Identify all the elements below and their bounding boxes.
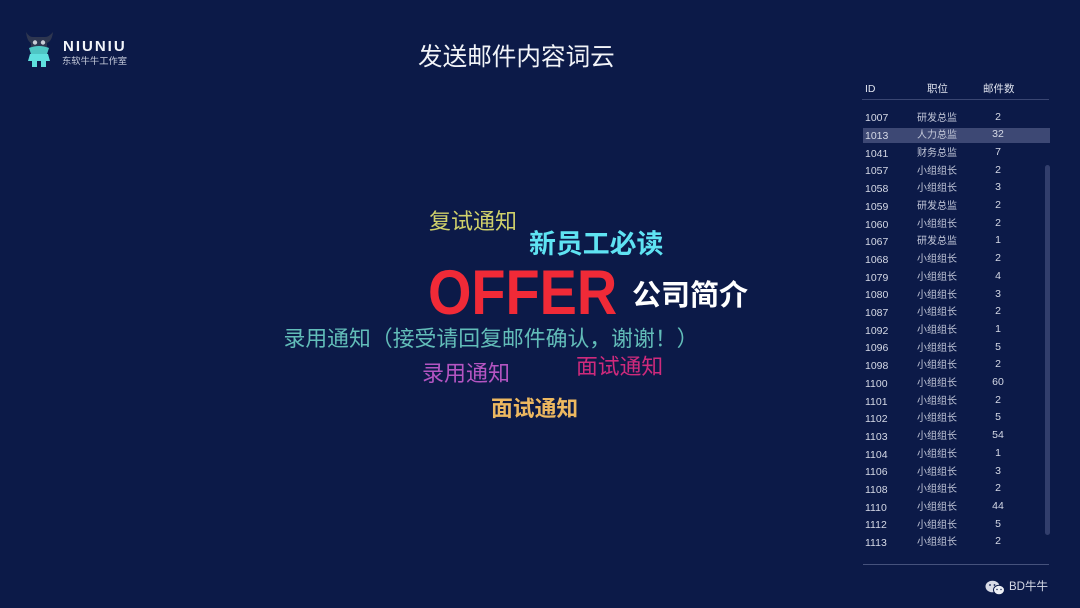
table header: ID (865, 83, 876, 95)
table rows: 小组组长 (917, 183, 957, 194)
table rows: 1 (995, 234, 1001, 246)
table rows: 小组组长 (917, 502, 957, 513)
word: 新员工必读: 新员工必读 (529, 222, 663, 261)
table: employee email counts (862, 83, 1050, 565)
table rows: 小组组长 (917, 325, 957, 336)
table header (862, 80, 1049, 100)
table rows: 5 (995, 518, 1001, 530)
table rows: 1113 (865, 537, 887, 549)
table rows: 2 (995, 394, 1001, 406)
table header: 邮件数 (983, 83, 1014, 95)
table rows: 1100 (865, 378, 888, 390)
table footer line (863, 564, 1049, 565)
table rows: 2 (995, 358, 1001, 370)
table rows: 1103 (865, 431, 888, 443)
table rows: 2 (995, 305, 1001, 317)
table rows: 2 (995, 217, 1001, 229)
table rows: 1059 (865, 201, 888, 213)
table header: 职位 (927, 83, 948, 95)
table rows: 小组组长 (917, 484, 957, 495)
table rows: 1087 (865, 307, 888, 319)
table rows: 小组组长 (917, 431, 957, 442)
table rows: 1 (995, 323, 1001, 335)
table rows: 财务总监 (917, 148, 957, 159)
word: 公司简介: 公司简介 (632, 272, 748, 314)
table rows: 3 (995, 288, 1001, 300)
table rows: 2 (995, 199, 1001, 211)
table rows: 小组组长 (917, 166, 957, 177)
table rows: 4 (995, 270, 1001, 282)
table rows: 小组组长 (917, 413, 957, 424)
logo subtitle: 东软牛牛工作室 (62, 56, 127, 66)
word: 录用通知(接受请回复邮件确认,谢谢!): 录用通知（接受请回复邮件确认，谢谢！） (284, 322, 699, 353)
watermark text: BD牛牛 (1009, 581, 1048, 593)
selected row highlight (863, 128, 1050, 143)
table rows: 2 (995, 111, 1001, 123)
table rows: 1079 (865, 272, 888, 284)
table rows: 研发总监 (917, 112, 957, 124)
scrollbar (1045, 165, 1050, 535)
table rows: 小组组长 (917, 466, 957, 478)
table rows: 1068 (865, 254, 888, 266)
table rows: 1060 (865, 219, 888, 231)
word: OFFER: OFFER (428, 258, 617, 328)
table rows: 5 (995, 411, 1001, 423)
table rows: 小组组长 (917, 254, 957, 265)
table rows: 1067 (865, 236, 888, 248)
table rows: 1007 (865, 112, 888, 124)
table rows: 小组组长 (917, 378, 957, 389)
title: 发送邮件内容词云 (418, 37, 615, 73)
table rows: 32 (992, 128, 1004, 140)
table rows: 小组组长 (917, 537, 957, 548)
table rows: 1057 (865, 165, 888, 177)
table rows: 1080 (865, 289, 888, 301)
table rows: 1101 (865, 396, 888, 408)
table rows: 2 (995, 252, 1001, 264)
table rows: 1110 (865, 502, 887, 514)
table rows: 1112 (865, 519, 887, 531)
table rows: 小组组长 (917, 272, 957, 283)
table rows: 1041 (865, 148, 888, 160)
table rows: 小组组长 (917, 449, 957, 460)
icon: wechat (986, 580, 1004, 594)
table rows: 2 (995, 535, 1001, 547)
table rows: 1106 (865, 466, 888, 478)
table rows: 5 (995, 341, 1001, 353)
table rows: 54 (992, 429, 1004, 441)
table rows: 3 (995, 465, 1001, 477)
table rows: 小组组长 (917, 290, 957, 300)
table rows: 2 (995, 482, 1001, 494)
table rows: 小组组长 (917, 343, 957, 354)
table rows: 小组组长 (917, 307, 957, 318)
table rows: 3 (995, 181, 1001, 193)
table rows: 小组组长 (917, 219, 957, 230)
table rows: 1 (995, 447, 1001, 459)
table rows: 1098 (865, 360, 888, 372)
logo wordmark: NIUNIU (63, 38, 127, 55)
table rows (865, 111, 1004, 549)
table rows: 小组组长 (917, 520, 957, 531)
table rows: 1058 (865, 183, 888, 195)
word: 录用通知 purple: 录用通知 (422, 356, 510, 388)
table rows: 60 (992, 376, 1004, 388)
table rows: 1013 (865, 130, 888, 142)
icon: bull mascot (26, 32, 53, 67)
table rows: 人力总监 (917, 130, 957, 141)
table rows: 1096 (865, 342, 888, 354)
table rows: 2 (995, 164, 1001, 176)
table rows: 7 (995, 146, 1001, 158)
watermark: BD牛牛 (986, 580, 1048, 594)
table rows: 小组组长 (917, 396, 957, 407)
table rows: 44 (992, 500, 1004, 512)
word cloud (284, 204, 748, 423)
table rows: 研发总监 (917, 236, 957, 247)
table rows: 小组组长 (917, 360, 957, 371)
word: 面试通知 orange: 面试通知 (491, 392, 578, 423)
word: 复试通知: 复试通知 (429, 204, 517, 236)
table rows: 研发总监 (917, 201, 957, 212)
table rows: 1104 (865, 449, 888, 461)
table rows: 1102 (865, 413, 888, 425)
table rows: 1092 (865, 325, 888, 337)
logo (26, 32, 127, 67)
word: 面试通知 pink: 面试通知 (576, 350, 663, 381)
table rows: 1108 (865, 484, 888, 496)
